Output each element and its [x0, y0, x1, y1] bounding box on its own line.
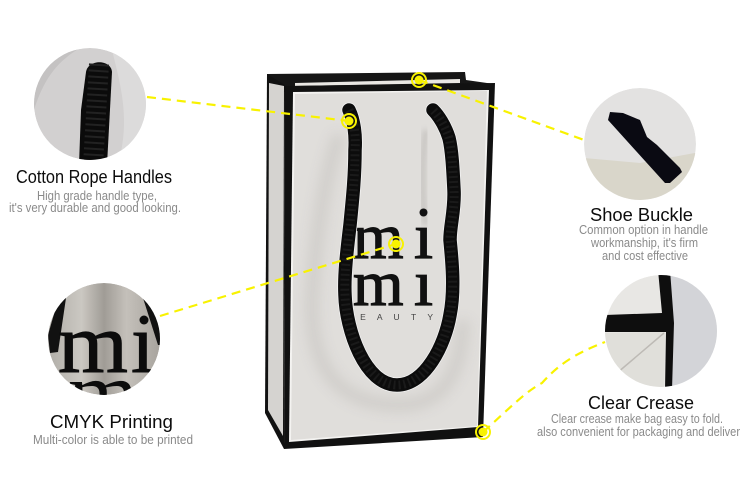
circle photo: print: m — [58, 297, 128, 391]
circle photo: rope — [34, 48, 150, 165]
description line 2: it's very durable and good looking. — [9, 201, 181, 215]
circle photo: crease — [605, 270, 720, 390]
bag left side panel — [265, 74, 285, 449]
panel: cotton rope handles — [9, 48, 181, 215]
logo: mi mi beauty — [343, 201, 433, 322]
logo beauty: B E A U T Y — [343, 312, 433, 322]
circle photo: buckle — [584, 88, 700, 205]
inner back edge — [295, 79, 460, 86]
circle photo: print — [48, 283, 160, 395]
title: Clear Crease — [588, 393, 694, 413]
bag back panel — [267, 72, 494, 92]
rope handle — [345, 110, 454, 385]
circle photo: print: m — [68, 346, 138, 440]
dashed line: printing — [160, 244, 396, 316]
bag front white panel — [289, 90, 489, 442]
description: High grade handle type, — [37, 189, 157, 203]
description: Common option in handle — [579, 223, 708, 237]
logo first line i: ı — [414, 201, 433, 273]
hotspot: corner — [476, 425, 490, 439]
logo dot — [420, 208, 428, 216]
handle shadows — [312, 130, 463, 405]
bag front black border — [284, 83, 495, 449]
logo second line m: m — [353, 248, 404, 320]
panel: shoe buckle — [579, 88, 708, 263]
panel: clear crease — [537, 270, 740, 439]
title: Cotton Rope Handles — [16, 167, 172, 187]
circle photo: print: ı — [131, 297, 155, 391]
logo first line m: m — [353, 201, 404, 273]
panel: cmyk printing — [33, 283, 193, 447]
description: Multi-color is able to be printed — [33, 433, 193, 447]
shopping bag — [265, 72, 495, 449]
hotspot: handle — [342, 114, 356, 128]
hotspot: top edge — [412, 73, 426, 87]
title: Shoe Buckle — [590, 205, 693, 225]
description line 2: workmanship, it's firm — [590, 236, 698, 250]
description: Clear crease make bag easy to fold. — [551, 412, 723, 426]
dashed line: crease — [483, 342, 605, 432]
description line 3: and cost effective — [602, 249, 688, 263]
dashed line: shoe buckle — [419, 80, 584, 140]
title: CMYK Printing — [50, 412, 173, 432]
dashed line: rope handles — [147, 97, 349, 121]
logo second line i: ı — [414, 248, 433, 320]
hotspot: logo — [389, 237, 403, 251]
